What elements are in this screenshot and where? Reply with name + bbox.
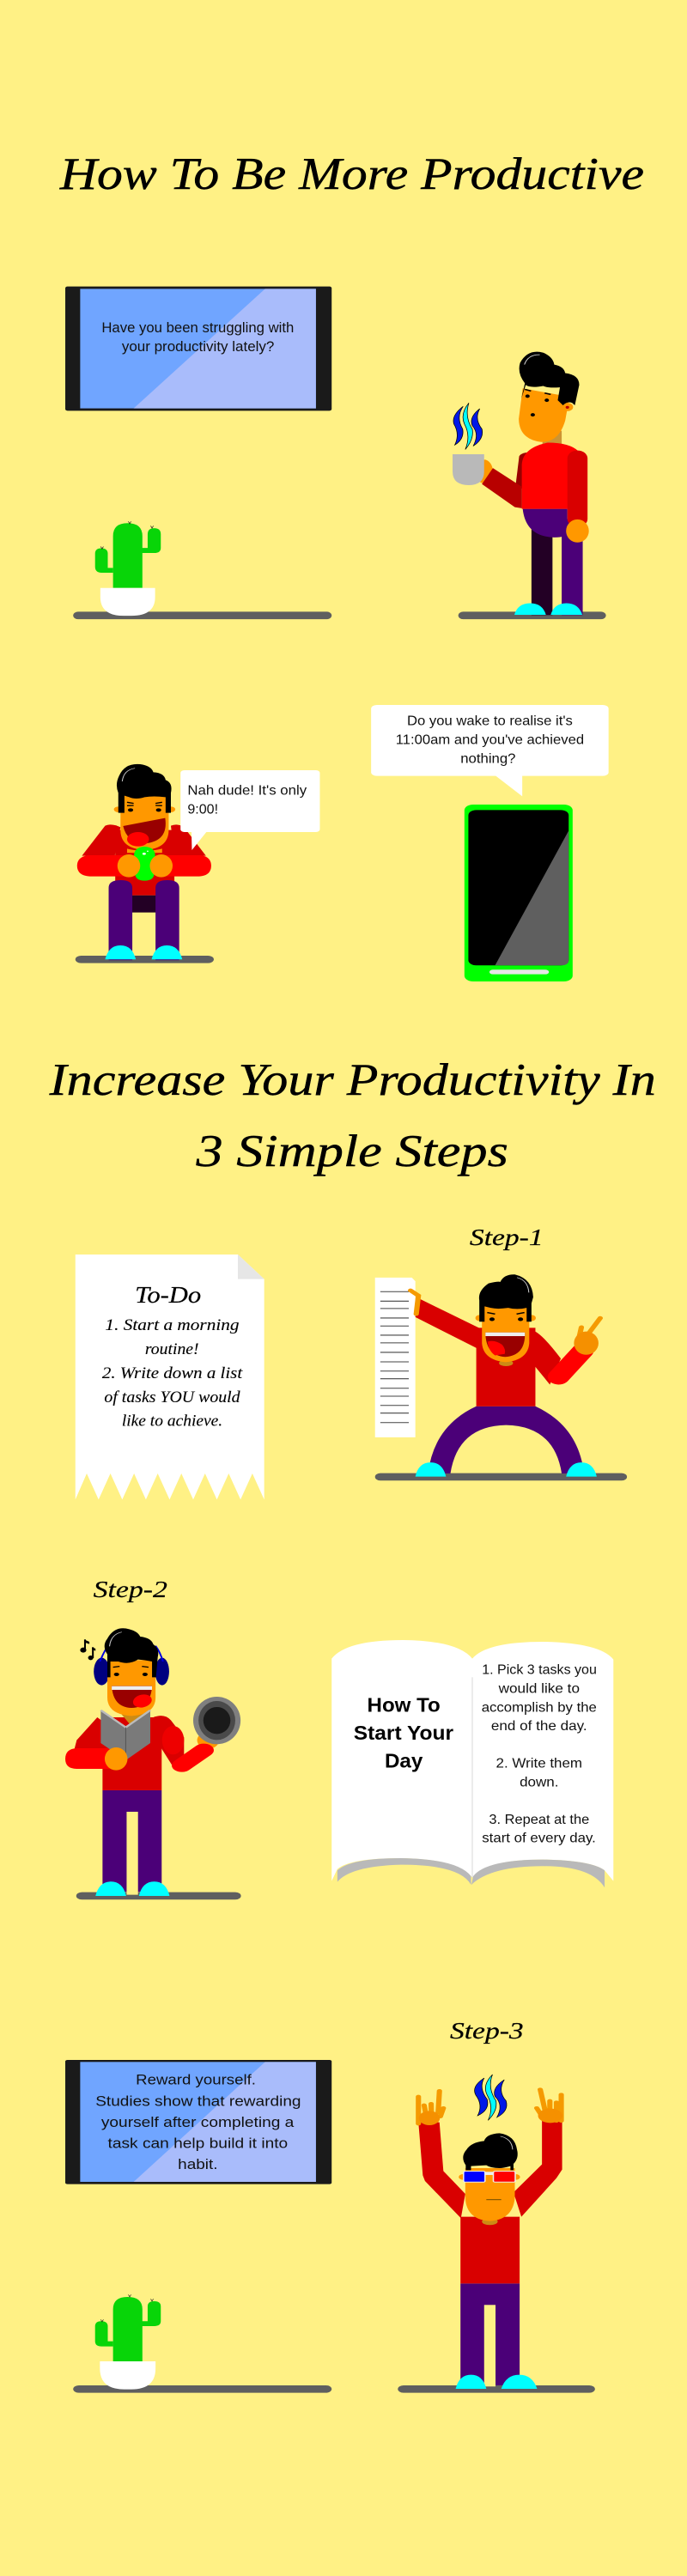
icon: steam — [453, 403, 483, 449]
open book — [331, 1640, 613, 1887]
heading line two: 3 Simple Steps — [196, 1127, 508, 1176]
speech bubble: do you wake: Do you wake to realise it's — [407, 714, 573, 728]
tv screen with reward text: Studies show that rewarding — [95, 2093, 301, 2109]
man holding coffee — [453, 352, 589, 615]
speech bubble: nah dude: 9:00! — [187, 803, 218, 817]
open book: end of the day. — [491, 1719, 587, 1734]
tv screen with reward text: yourself after completing a — [101, 2114, 295, 2130]
speech bubble: do you wake: 11:00am and you've achieved — [396, 732, 584, 747]
floor under cactus — [73, 2385, 331, 2393]
tv screen with reward text: Reward yourself. — [136, 2071, 256, 2088]
speech bubble: nah dude: Nah dude! It's only — [187, 784, 307, 799]
man with arms raised wearing 3d glasses — [418, 2089, 562, 2389]
section: step 2 — [65, 1577, 613, 1899]
open book: 3. Repeat at the — [489, 1813, 589, 1827]
to-do note: routine! — [145, 1340, 199, 1358]
open book: accomplish by the — [482, 1700, 597, 1715]
floor — [76, 1893, 241, 1899]
to-do note: like to achieve. — [122, 1412, 222, 1431]
section: intro tv and man with coffee — [59, 149, 644, 619]
to-do note: of tasks YOU would — [104, 1388, 240, 1406]
floor under man — [398, 2385, 595, 2393]
seated man with phone — [77, 764, 211, 960]
open book: 1. Pick 3 tasks you — [482, 1663, 597, 1678]
to-do note — [76, 1255, 264, 1499]
open book: down. — [520, 1775, 559, 1789]
speech bubble: do you wake — [371, 705, 609, 796]
open book: How To — [368, 1694, 441, 1716]
floor — [375, 1473, 627, 1480]
step 3 label: Step-3 — [450, 2018, 524, 2044]
open book: Day — [385, 1751, 423, 1772]
long paper list — [375, 1278, 416, 1437]
open book: would like to — [498, 1681, 580, 1696]
smartphone — [465, 805, 573, 981]
to-do note: 2. Write down a list — [102, 1364, 243, 1382]
section: step 3 — [65, 2018, 595, 2393]
tv screen with reward text: task can help build it into — [108, 2135, 288, 2151]
section: morning scene — [76, 705, 609, 981]
to-do note: 1. Start a morning — [105, 1316, 240, 1334]
floor under man — [459, 611, 606, 619]
floor under seated man — [76, 956, 214, 963]
speech bubble: nah dude — [180, 770, 319, 850]
man with book and headphones — [65, 1628, 240, 1896]
open book: start of every day. — [482, 1831, 596, 1846]
icon: music notes — [80, 1639, 95, 1660]
icon: steam above head — [475, 2075, 507, 2120]
step 2 label: Step-2 — [94, 1577, 167, 1602]
step 1 label: Step-1 — [470, 1224, 544, 1250]
icon: cactus in pot — [95, 2294, 161, 2390]
man presenting list — [410, 1274, 600, 1477]
to-do note: To-Do — [135, 1283, 201, 1309]
tv screen with question — [65, 287, 331, 410]
speech bubble: do you wake: nothing? — [460, 751, 516, 766]
tv screen with question: your productivity lately? — [122, 339, 274, 355]
tv screen with reward text — [65, 2060, 331, 2184]
tv screen with reward text: habit. — [178, 2156, 218, 2172]
open book: 2. Write them — [496, 1756, 582, 1771]
tv screen with question: Have you been struggling with — [101, 320, 294, 336]
section: step 1 — [49, 1055, 656, 1499]
open book: Start Your — [354, 1722, 453, 1744]
floor under cactus — [73, 611, 331, 619]
icon: cactus in pot — [95, 521, 161, 616]
